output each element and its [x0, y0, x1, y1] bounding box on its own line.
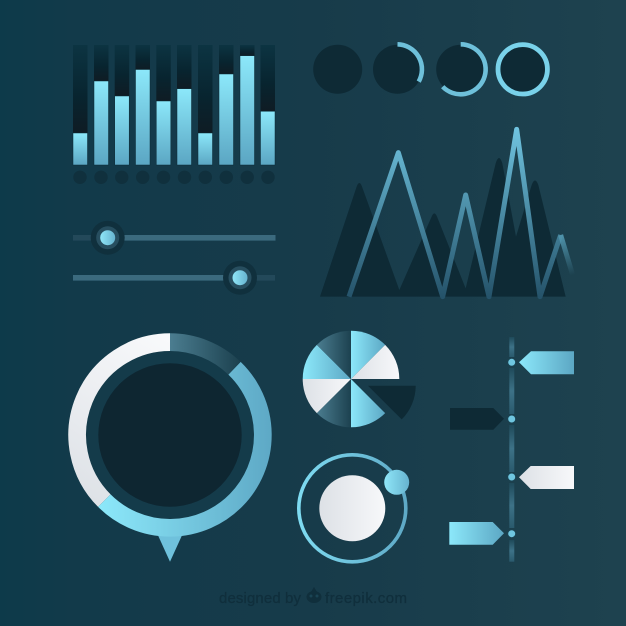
donut chart [77, 342, 263, 562]
bar track backgrounds [73, 45, 275, 133]
orbit diagram [299, 455, 409, 562]
timeline axis [509, 337, 514, 562]
donut inner ring [86, 351, 254, 519]
progress circle 66% [436, 44, 486, 94]
segment white [77, 342, 170, 501]
line mountains [349, 129, 561, 297]
credit [219, 587, 407, 607]
fading line end [561, 235, 573, 275]
bar chart [73, 45, 275, 184]
credit: designed by [219, 590, 302, 607]
timeline [449, 337, 574, 562]
progress circle 0% [313, 45, 362, 94]
dark mountains [320, 158, 566, 297]
progress circle 100% [498, 45, 547, 94]
progress circle 33% [373, 44, 422, 94]
bar label dots [73, 171, 275, 184]
slider top [73, 221, 276, 255]
segment blue [104, 368, 263, 528]
mountain chart [320, 129, 573, 297]
segment dark [170, 342, 234, 368]
icon: freepik mascot [306, 587, 322, 603]
tag white right [519, 466, 574, 489]
bar values [73, 56, 275, 165]
tag dark left [450, 408, 504, 430]
slider bottom [73, 261, 275, 295]
credit: freepik.com [325, 590, 407, 607]
tag blue left [449, 522, 504, 545]
donut pointer [158, 536, 182, 562]
timeline nodes [508, 358, 516, 538]
donut centre [98, 363, 242, 507]
pie chart [303, 331, 416, 427]
tag blue right [519, 351, 574, 374]
